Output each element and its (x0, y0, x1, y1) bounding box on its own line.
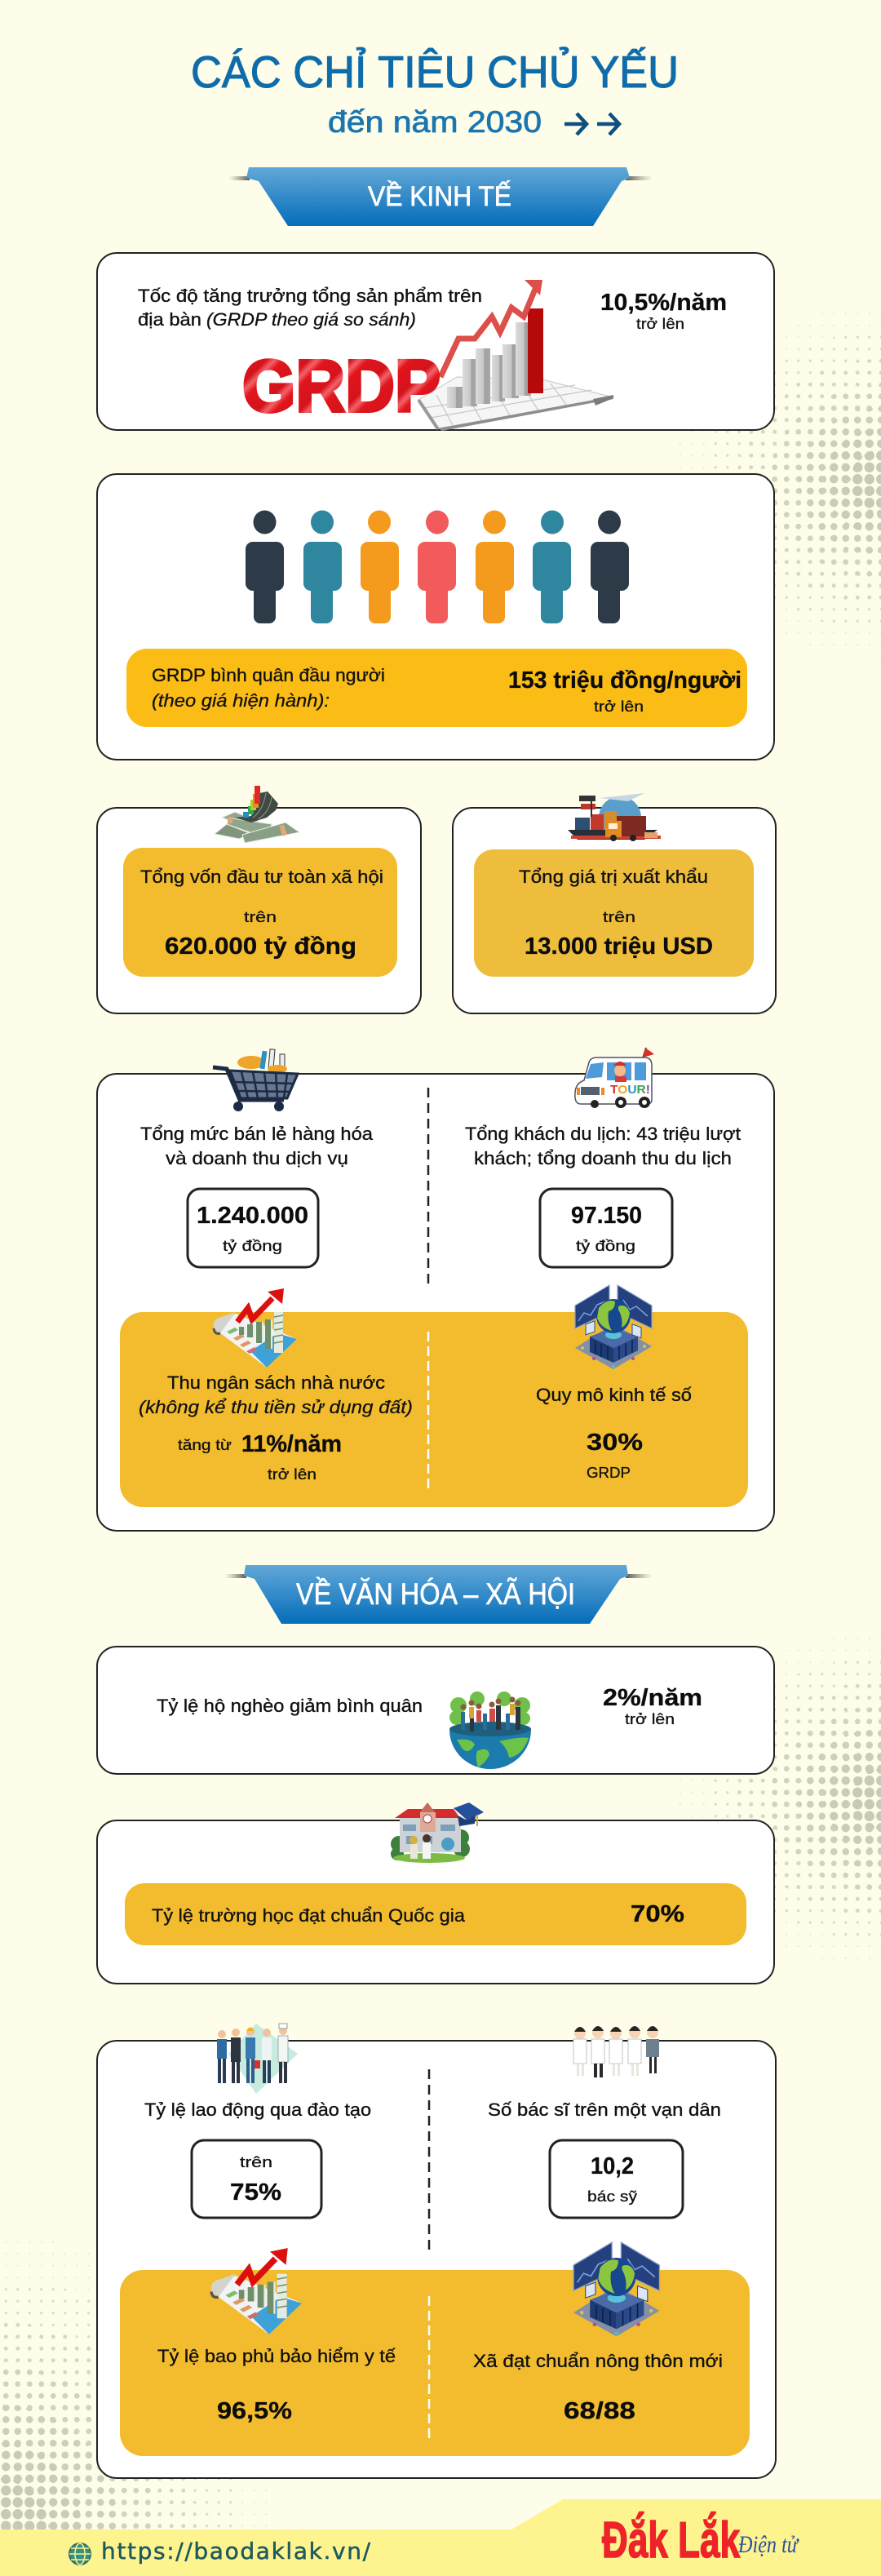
panel: budget and digital economy (120, 1285, 748, 1507)
icon: digital globe (573, 2242, 659, 2336)
text: insurance coverage (157, 2346, 396, 2424)
panel: GRDP growth (97, 253, 774, 431)
text: retail sales (140, 1124, 374, 1168)
text: tourism (465, 1124, 741, 1168)
panel: export value (453, 793, 776, 1013)
section banner: về văn hóa - xã hội: VỀ VĂN HÓA – XÃ HỘI (296, 1577, 575, 1611)
box: export value (474, 849, 754, 977)
value box: 10,2 bác sỹ: bác sỹ (587, 2188, 637, 2205)
icon: budget chart (214, 1288, 297, 1368)
value box: 1.240.000 tỷ đồng: 1.240.000 (197, 1203, 308, 1229)
icon: GRDP rising chart: GRDP (242, 346, 440, 428)
bar: school rate: 70% (631, 1901, 684, 1927)
text: doctors: Số bác sĩ trên một vạn dân (488, 2099, 721, 2120)
icon: tour van: TOUR! (610, 1083, 650, 1097)
text: new rural communes: 68/88 (564, 2398, 635, 2424)
box: investment value: 620.000 tỷ đồng (165, 933, 356, 960)
text: GRDP growth description: (GRDP theo giá so sánh) (206, 309, 416, 330)
panel: GRDP per capita (97, 474, 774, 760)
icon: money stack with chart (215, 786, 299, 843)
icon: double arrow (564, 113, 619, 135)
text: digital economy: Quy mô kinh tế số (536, 1385, 692, 1405)
box: export value: Tổng giá trị xuất khẩu (519, 867, 708, 887)
icon: tour van (575, 1048, 654, 1108)
bar: school rate (125, 1883, 746, 1945)
value box: 97.150 tỷ đồng: 97.150 (571, 1203, 642, 1229)
text: retail sales: và doanh thu dịch vụ (166, 1148, 348, 1168)
icon: GRDP rising chart (242, 280, 613, 431)
text: tourism: khách; tổng doanh thu du lịch (474, 1148, 732, 1168)
text: state budget revenue: tăng từ (178, 1437, 232, 1453)
value box: trên 75% (192, 2140, 321, 2218)
value box: 10,2 bác sỹ: 10,2 (591, 2153, 634, 2179)
section banner: về văn hóa - xã hội (224, 1565, 653, 1624)
text: state budget revenue: trở lên (268, 1466, 317, 1483)
section banner: về kinh tế: VỀ KINH TẾ (368, 181, 511, 212)
logo: Đắk Lắk Điện tử: Đắk Lắk (602, 2512, 740, 2569)
bar: school rate: Tỷ lệ trường học đạt chuẩn Quốc gia (152, 1905, 466, 1926)
box: export value: trên (603, 909, 635, 925)
panel: total investment (97, 786, 421, 1013)
text: GRDP growth description (138, 286, 482, 330)
value box: 1.240.000 tỷ đồng: tỷ đồng (223, 1238, 282, 1254)
panel: insurance and new rural (120, 2242, 750, 2456)
panel: poverty rate (97, 1647, 774, 1774)
bar: GRDP per capita value: 153 triệu đồng/người (508, 667, 742, 694)
value: 10,5%/năm: trở lên (636, 316, 684, 332)
text: state budget revenue: (không kể thu tiền sử dụng đất) (139, 1397, 413, 1417)
text: tourism: Tổng khách du lịch: 43 triệu lượt (465, 1124, 741, 1144)
text: digital economy (536, 1385, 692, 1481)
text: new rural communes: Xã đạt chuẩn nông thôn mới (473, 2351, 723, 2371)
value: 2%/năm (603, 1685, 702, 1727)
icon: shopping cart (213, 1049, 298, 1111)
section banner: về kinh tế (228, 167, 653, 226)
value: 10,5%/năm: 10,5%/năm (600, 290, 727, 316)
panel: retail, tourism, budget, digital economy (97, 1048, 774, 1531)
bar: GRDP per capita value: (theo giá hiện hành): (152, 690, 330, 711)
text: state budget revenue: 11%/năm (241, 1431, 342, 1457)
icon: people on globe (449, 1691, 531, 1769)
logo: Đắk Lắk Điện tử: Điện tử (737, 2531, 799, 2558)
icon: cargo ship and truck (568, 793, 661, 841)
text: digital economy: GRDP (587, 1465, 631, 1481)
box: export value: 13.000 triệu USD (525, 933, 713, 960)
text: GRDP growth description: địa bàn (138, 309, 201, 330)
value box: trên 75%: 75% (230, 2179, 281, 2206)
panel: national standard schools (97, 1802, 774, 1984)
text: state budget revenue: Thu ngân sách nhà nước (167, 1372, 385, 1393)
icon: doctors (573, 2026, 659, 2077)
title: CÁC CHỈ TIÊU CHỦ YẾU (191, 47, 679, 97)
text: insurance coverage: Tỷ lệ bao phủ bảo hiểm y tế (157, 2346, 396, 2366)
text: labour training: Tỷ lệ lao động qua đào tạo (144, 2099, 371, 2120)
bar: GRDP per capita value: trở lên (594, 698, 644, 715)
value box: 97.150 tỷ đồng (540, 1189, 672, 1267)
website url: https://baodaklak.vn/ (101, 2538, 371, 2565)
text: GRDP growth description: Tốc độ tăng trưởng tổng sản phẩm trên (138, 286, 482, 306)
text: state budget revenue (139, 1372, 413, 1483)
value: 10,5%/năm (600, 290, 727, 332)
icon: insurance chart (211, 2248, 302, 2334)
box: investment value: Tổng vốn đầu tư toàn xã hội (140, 867, 383, 887)
value: 2%/năm: 2%/năm (603, 1685, 702, 1711)
footer (0, 2499, 881, 2576)
panel: labour, doctors, insurance, new rural (97, 2024, 776, 2478)
box: investment value: trên (244, 909, 277, 925)
text: poverty label: Tỷ lệ hộ nghèo giảm bình quân (157, 1696, 423, 1716)
icon: web globe (69, 2543, 91, 2565)
icon: row of people (246, 511, 629, 623)
value box: 1.240.000 tỷ đồng (188, 1189, 318, 1267)
subtitle: đến năm 2030 (328, 105, 542, 139)
text: digital economy: 30% (587, 1430, 643, 1456)
icon: school (391, 1802, 484, 1863)
text: insurance coverage: 96,5% (217, 2398, 292, 2424)
icon: workers (217, 2024, 298, 2094)
icon: digital globe (575, 1285, 652, 1369)
value box: 97.150 tỷ đồng: tỷ đồng (576, 1238, 635, 1254)
text: retail sales: Tổng mức bán lẻ hàng hóa (140, 1124, 374, 1144)
box: investment value (123, 848, 397, 977)
bar: GRDP per capita value: GRDP bình quân đầu người (152, 665, 385, 685)
value box: trên 75%: trên (240, 2154, 272, 2170)
text: new rural communes (473, 2351, 723, 2424)
bar: GRDP per capita value (126, 649, 747, 727)
value: 2%/năm: trở lên (625, 1711, 675, 1727)
value box: 10,2 bác sỹ (550, 2140, 683, 2218)
